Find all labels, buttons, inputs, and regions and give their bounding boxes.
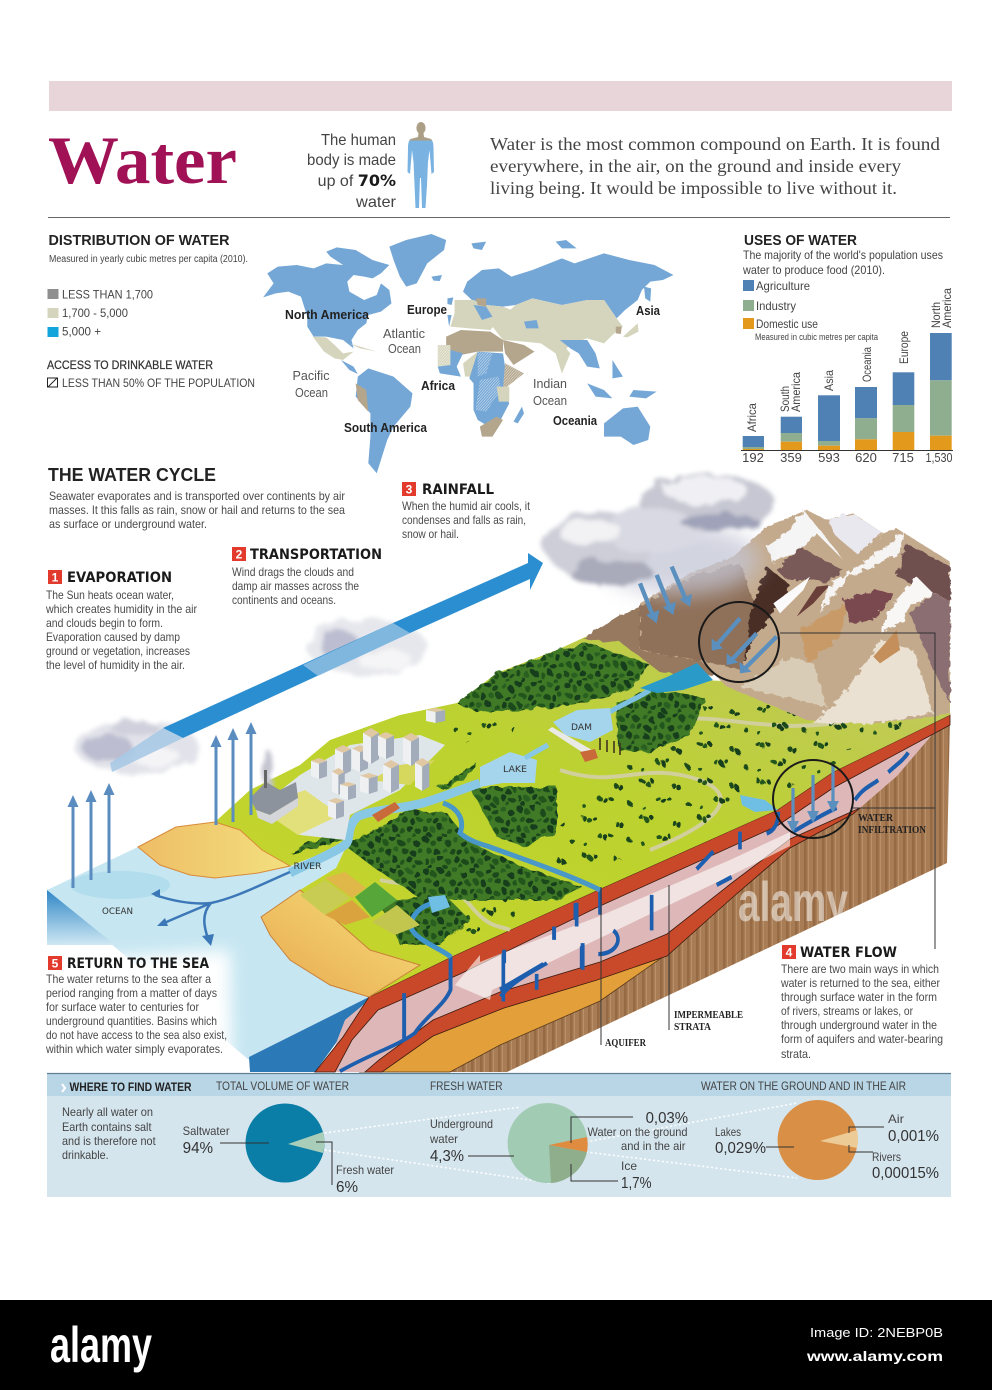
- pie: fresh water: Underground: [430, 1117, 493, 1131]
- map labels: Africa: [421, 378, 456, 393]
- panel: distribution of water: [47, 233, 255, 390]
- sand: left shore: [138, 822, 290, 878]
- intro text: everywhere, in the air, on the ground and inside every: [490, 156, 901, 176]
- step 4: water flow: through surface water in the form: [781, 990, 937, 1004]
- icon: human figure: [408, 122, 434, 208]
- human body fact: water: [355, 194, 397, 211]
- bar chart: North: [929, 302, 943, 328]
- bar legend: Agriculture: [756, 279, 810, 293]
- water cycle intro: Seawater evaporates and is transported over continents by air: [49, 489, 345, 503]
- human body fact: up of 70%: [318, 171, 396, 190]
- map labels: Indian: [533, 376, 567, 391]
- step 2: transportation: [232, 547, 382, 607]
- heading: uses: USES OF WATER: [744, 233, 857, 249]
- pie: fresh water: Water on the ground: [588, 1125, 688, 1139]
- step 5: return to the sea: RETURN TO THE SEA: [67, 956, 209, 972]
- map labels: Pacific: [292, 368, 330, 383]
- step 4: water flow: [780, 945, 943, 1061]
- drinkable water legend: [47, 358, 255, 390]
- step 4: water flow: through underground water in the: [781, 1018, 937, 1032]
- step 3: rainfall: snow or hail.: [402, 527, 459, 541]
- pie: fresh water: 4,3%: [430, 1148, 464, 1165]
- label: dam: DAM: [571, 723, 592, 733]
- uses description: water to produce food (2010).: [742, 263, 885, 277]
- step 5: return to the sea: period ranging from a matter of days: [46, 986, 217, 1000]
- cloud: middle: [307, 619, 427, 675]
- city: [258, 708, 445, 840]
- map labels: [285, 302, 661, 435]
- step 4: water flow: There are two main ways in which: [781, 962, 939, 976]
- step 1: evaporation: Evaporation caused by damp: [46, 630, 180, 644]
- step 4: water flow: form of aquifers and water-bearing: [781, 1032, 943, 1046]
- step 1: evaporation: [45, 570, 197, 672]
- step 3: rainfall: 3: [406, 482, 413, 496]
- map labels: North America: [285, 307, 370, 322]
- label: lake: LAKE: [503, 765, 527, 775]
- step 2: transportation: TRANSPORTATION: [250, 547, 382, 563]
- world map: [263, 234, 673, 473]
- magnifier circles and leader lines: [601, 602, 935, 1045]
- footer band: [0, 1300, 992, 1390]
- strata: aquifer pink layer: [325, 722, 948, 1072]
- water cycle intro: [49, 489, 345, 531]
- step 4: water flow: WATER FLOW: [800, 945, 897, 961]
- step 3: rainfall: RAINFALL: [422, 482, 494, 498]
- map labels: Ocean: [295, 385, 328, 400]
- footer band: Image ID: 2NEBP0B: [810, 1325, 943, 1340]
- strata: lower red layer: [365, 808, 860, 1072]
- pie: water on the ground and in the air: [715, 1100, 939, 1182]
- step 5: return to the sea: for surface water to centuries for: [46, 1000, 199, 1014]
- rain veil: [600, 525, 760, 595]
- sand: lower shore: [261, 890, 420, 997]
- step 5: return to the sea: [45, 956, 227, 1056]
- human body fact: body is made: [307, 152, 396, 169]
- arrows: evaporation: [68, 722, 256, 888]
- pie: water on the ground and in the air: Lakes: [715, 1125, 741, 1139]
- label: river: RIVER: [294, 862, 322, 872]
- bar legend: [743, 279, 878, 342]
- step 1: evaporation: 1: [52, 570, 59, 584]
- top colour band: [49, 81, 952, 111]
- pie: fresh water: 0,03%: [646, 1110, 688, 1127]
- panel: where to find water: [47, 1073, 951, 1197]
- label: water infiltration: [858, 813, 926, 836]
- uses description: [742, 248, 943, 277]
- watermark: alamy: [738, 870, 848, 933]
- step 2: transportation: 2: [236, 548, 243, 562]
- human body fact: [307, 132, 397, 211]
- bar chart: 620: [855, 450, 877, 465]
- step 5: return to the sea: do not have access to the sea also exist,: [46, 1028, 227, 1042]
- step 5: return to the sea: 5: [52, 956, 59, 970]
- bar chart: [741, 288, 954, 465]
- panel: uses of water: [741, 233, 954, 465]
- bar chart: America: [940, 288, 954, 328]
- pie: fresh water: Ice: [621, 1159, 637, 1173]
- uses description: The majority of the world's population uses: [743, 248, 943, 262]
- water cycle intro: as surface or underground water.: [49, 517, 207, 531]
- label: aquifer: AQUIFER: [605, 1038, 646, 1049]
- arrow: air mass transport: [110, 553, 543, 772]
- map labels: Ocean: [533, 393, 567, 408]
- step 4: water flow: 4: [786, 946, 793, 960]
- step 4: water flow: water is returned to the sea, either: [780, 976, 940, 990]
- factory: [250, 750, 298, 824]
- arrows: river to sea: [151, 872, 290, 946]
- arrows: rainfall: [640, 567, 777, 673]
- bar legend: Measured in cubic metres per capita: [755, 332, 878, 342]
- step 1: evaporation: which creates humidity in the air: [45, 602, 197, 616]
- step 3: rainfall: [402, 482, 531, 541]
- strata: orange layer: [360, 954, 667, 1072]
- farm fields: [300, 872, 420, 935]
- cloud: rain cloud: [544, 474, 775, 585]
- pie: fresh water: and in the air: [621, 1139, 686, 1153]
- map labels: Oceania: [553, 413, 598, 428]
- cloud: left: [75, 720, 199, 773]
- bar chart: 715: [892, 450, 914, 465]
- pie: fresh water: [429, 1103, 688, 1192]
- bar chart: 192: [742, 450, 764, 465]
- intro text: living being. It would be impossible to live without it.: [490, 178, 897, 198]
- intro text: [490, 134, 940, 198]
- step 2: transportation: damp air masses across the: [232, 579, 359, 593]
- bar chart: Europe: [897, 331, 911, 364]
- bar chart: 359: [780, 450, 802, 465]
- step 4: water flow: of rivers, streams or lakes, or: [781, 1004, 913, 1018]
- pale meadows and tracks: [380, 718, 850, 930]
- panel header band: WATER ON THE GROUND AND IN THE AIR: [701, 1079, 906, 1093]
- illustration: water cycle block diagram: [47, 474, 950, 1072]
- footer band: alamy: [50, 1317, 152, 1373]
- bar chart: America: [789, 372, 803, 412]
- label: impermeable strata: [674, 1010, 743, 1033]
- label: water infiltration: INFILTRATION: [858, 825, 926, 836]
- pie: total volume of water: 94%: [183, 1140, 213, 1157]
- bar legend: Domestic use: [756, 317, 818, 331]
- step 1: evaporation: EVAPORATION: [67, 570, 172, 586]
- step 5: return to the sea: underground quantities. Basins which: [46, 1014, 217, 1028]
- map labels: Atlantic: [383, 326, 425, 341]
- water cycle intro: masses. It this falls as rain, snow or hail and returns to the sea: [49, 503, 345, 517]
- bar legend: Industry: [756, 299, 796, 313]
- label: ocean: OCEAN: [102, 907, 133, 917]
- pie: total volume of water: Saltwater: [183, 1124, 230, 1138]
- panel intro text: and is therefore not: [62, 1134, 156, 1148]
- arrows: infiltration: [787, 765, 839, 833]
- pie: total volume of water: Fresh water: [336, 1163, 394, 1177]
- arrow: underground flow: [455, 832, 790, 1000]
- footer band: www.alamy.com: [806, 1348, 943, 1364]
- label: water infiltration: WATER: [858, 813, 893, 824]
- step 4: water flow: strata.: [781, 1047, 811, 1061]
- strata: upper red layer: [315, 715, 950, 1072]
- bar chart: Africa: [745, 403, 759, 432]
- step 1: evaporation: The Sun heats ocean water,: [46, 588, 174, 602]
- panel header band: FRESH WATER: [430, 1079, 503, 1093]
- bar chart: Oceania: [860, 347, 874, 382]
- heading: the water cycle: THE WATER CYCLE: [48, 465, 216, 485]
- subtitle: Measured in yearly cubic metres per capita (2010).: [49, 254, 248, 265]
- step 1: evaporation: ground or vegetation, increases: [46, 644, 190, 658]
- step 1: evaporation: the level of humidity in the air.: [46, 658, 185, 672]
- bar chart: 593: [818, 450, 840, 465]
- pie: fresh water: 1,7%: [621, 1175, 652, 1192]
- intro text: Water is the most common compound on Earth. It is found: [490, 134, 940, 154]
- label: impermeable strata: STRATA: [674, 1022, 711, 1033]
- step 3: rainfall: condenses and falls as rain,: [402, 513, 526, 527]
- panel intro text: Earth contains salt: [62, 1120, 152, 1134]
- map legend: LESS THAN 1,700: [62, 288, 153, 302]
- map legend: 1,700 - 5,000: [62, 306, 128, 320]
- map labels: Asia: [636, 303, 661, 318]
- panel intro text: [62, 1105, 156, 1162]
- pie: water on the ground and in the air: 0,00015%: [872, 1165, 939, 1182]
- panel header band: [47, 1073, 951, 1096]
- panel intro text: drinkable.: [62, 1148, 109, 1162]
- panel header band: TOTAL VOLUME OF WATER: [216, 1079, 349, 1093]
- pie: total volume of water: [183, 1104, 394, 1196]
- pie: water on the ground and in the air: 0,001%: [888, 1128, 939, 1145]
- label: impermeable strata: IMPERMEABLE: [674, 1010, 743, 1021]
- mountains: [583, 510, 950, 723]
- pie: total volume of water: 6%: [336, 1179, 358, 1196]
- bar chart: Asia: [822, 370, 836, 391]
- land surface: [138, 622, 950, 997]
- step 5: return to the sea: within which water simply evaporates.: [45, 1042, 223, 1056]
- panel header band: WHERE TO FIND WATER: [70, 1080, 192, 1094]
- forests: [290, 643, 930, 945]
- strata: brown base: [315, 715, 950, 1072]
- underground water: [340, 753, 908, 1071]
- map labels: Europe: [407, 302, 447, 317]
- drinkable water legend: LESS THAN 50% OF THE POPULATION: [62, 376, 255, 390]
- step 2: transportation: Wind drags the clouds and: [232, 565, 354, 579]
- step 3: rainfall: When the humid air cools, it: [402, 499, 531, 513]
- drinkable water legend: ACCESS TO DRINKABLE WATER: [47, 358, 213, 372]
- pie: fresh water: water: [429, 1132, 458, 1146]
- map labels: South America: [344, 420, 428, 435]
- pie: water on the ground and in the air: Air: [888, 1112, 904, 1126]
- dotted connectors: [325, 1103, 797, 1183]
- panel intro text: Nearly all water on: [62, 1105, 153, 1119]
- bar chart: South: [778, 386, 792, 412]
- pie: water on the ground and in the air: Rivers: [872, 1150, 901, 1164]
- human body fact: The human: [321, 132, 396, 149]
- title: Water: [48, 122, 237, 198]
- pie: water on the ground and in the air: 0,029%: [715, 1140, 766, 1157]
- map legend: [48, 288, 153, 338]
- sea: [47, 843, 369, 1072]
- map labels: Ocean: [388, 341, 421, 356]
- step 5: return to the sea: The water returns to the sea after a: [46, 972, 211, 986]
- heading: distribution: DISTRIBUTION OF WATER: [48, 233, 230, 249]
- step 1: evaporation: and clouds begin to form.: [46, 616, 163, 630]
- bar chart: 1,530: [926, 450, 952, 465]
- map legend: 5,000 +: [62, 324, 101, 338]
- rivers and lakes: [290, 663, 778, 957]
- step 2: transportation: continents and oceans.: [232, 593, 336, 607]
